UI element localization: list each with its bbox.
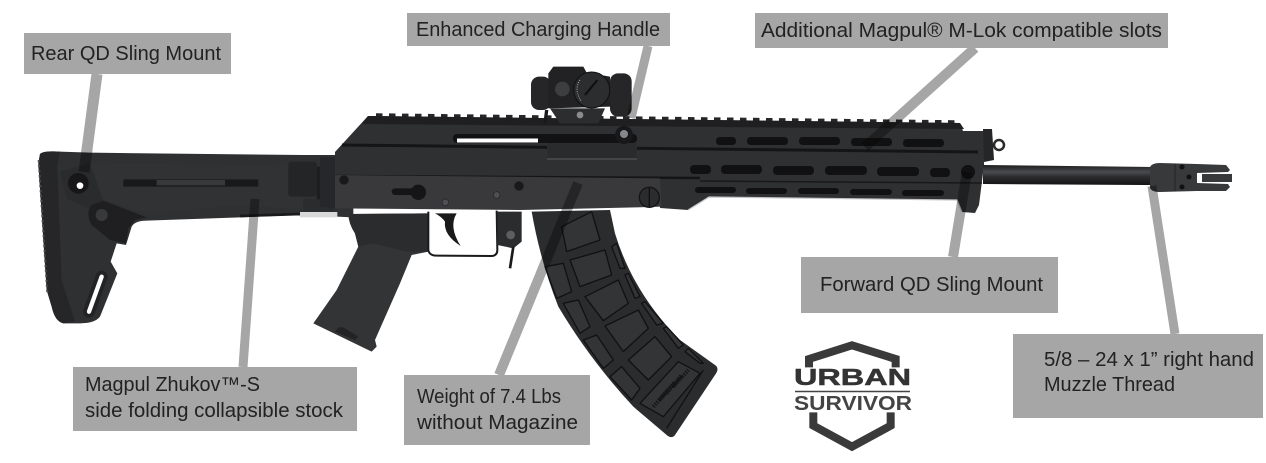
rifle magazine [532, 210, 717, 437]
rifle stock [38, 151, 353, 323]
callout: rear QD sling mount [24, 33, 231, 74]
magazine release [497, 212, 522, 248]
rifle lower receiver [320, 157, 662, 210]
callout: enhanced charging handle [407, 13, 670, 46]
callout: Magpul Zhukov stock: side folding collapsible stock [85, 400, 344, 422]
callout: muzzle thread: 5/8 – 24 x 1” right hand [1044, 349, 1254, 371]
callout: enhanced charging handle: Enhanced Charging Handle [416, 19, 660, 41]
rifle pistol grip and trigger group [313, 211, 522, 352]
callout: muzzle thread: Muzzle Thread [1044, 374, 1175, 396]
arrow: muzzle thread leader [1152, 186, 1175, 334]
callout: weight: without Magazine [416, 412, 578, 434]
callout: weight [404, 375, 590, 445]
callout: rear QD sling mount: Rear QD Sling Mount [31, 43, 221, 65]
arrow: stock leader [243, 199, 255, 367]
logo: Urban Survivor [794, 345, 913, 447]
grip base plate [335, 327, 358, 340]
rifle upper receiver and handguard [335, 115, 984, 213]
arrow: M-Lok slots leader [865, 48, 975, 147]
grip upper section [350, 213, 428, 252]
rifle front sight [983, 129, 1004, 162]
callout: Magpul Zhukov stock: Magpul Zhukov™-S [85, 374, 260, 396]
callout: Magpul Zhukov stock [73, 367, 357, 431]
logo: Urban Survivor: SURVIVOR [794, 393, 913, 415]
callout: forward QD sling mount [801, 257, 1058, 313]
rifle muzzle brake [1150, 163, 1232, 192]
arrow: forward sling mount leader [953, 172, 967, 257]
trigger [435, 213, 461, 246]
icon: rifle [38, 67, 1232, 437]
rifle barrel [983, 165, 1152, 185]
logo: Urban Survivor: URBAN [794, 364, 911, 390]
callout: muzzle thread [1013, 334, 1263, 418]
callout: forward QD sling mount: Forward QD Sling Mount [820, 274, 1043, 296]
callout: M-Lok slots: Additional Magpul® M-Lok compatible slots [761, 20, 1162, 42]
arrow: rear sling mount leader [84, 74, 97, 172]
callout: M-Lok slots [755, 13, 1168, 48]
arrow: charging handle leader [631, 46, 648, 118]
arrow: weight leader [499, 183, 578, 375]
pistol grip [313, 213, 428, 352]
rifle optic [531, 67, 632, 123]
callout: weight: Weight of 7.4 Lbs [417, 386, 561, 408]
handguard M-Lok slots [690, 137, 975, 196]
trigger guard [428, 211, 497, 256]
